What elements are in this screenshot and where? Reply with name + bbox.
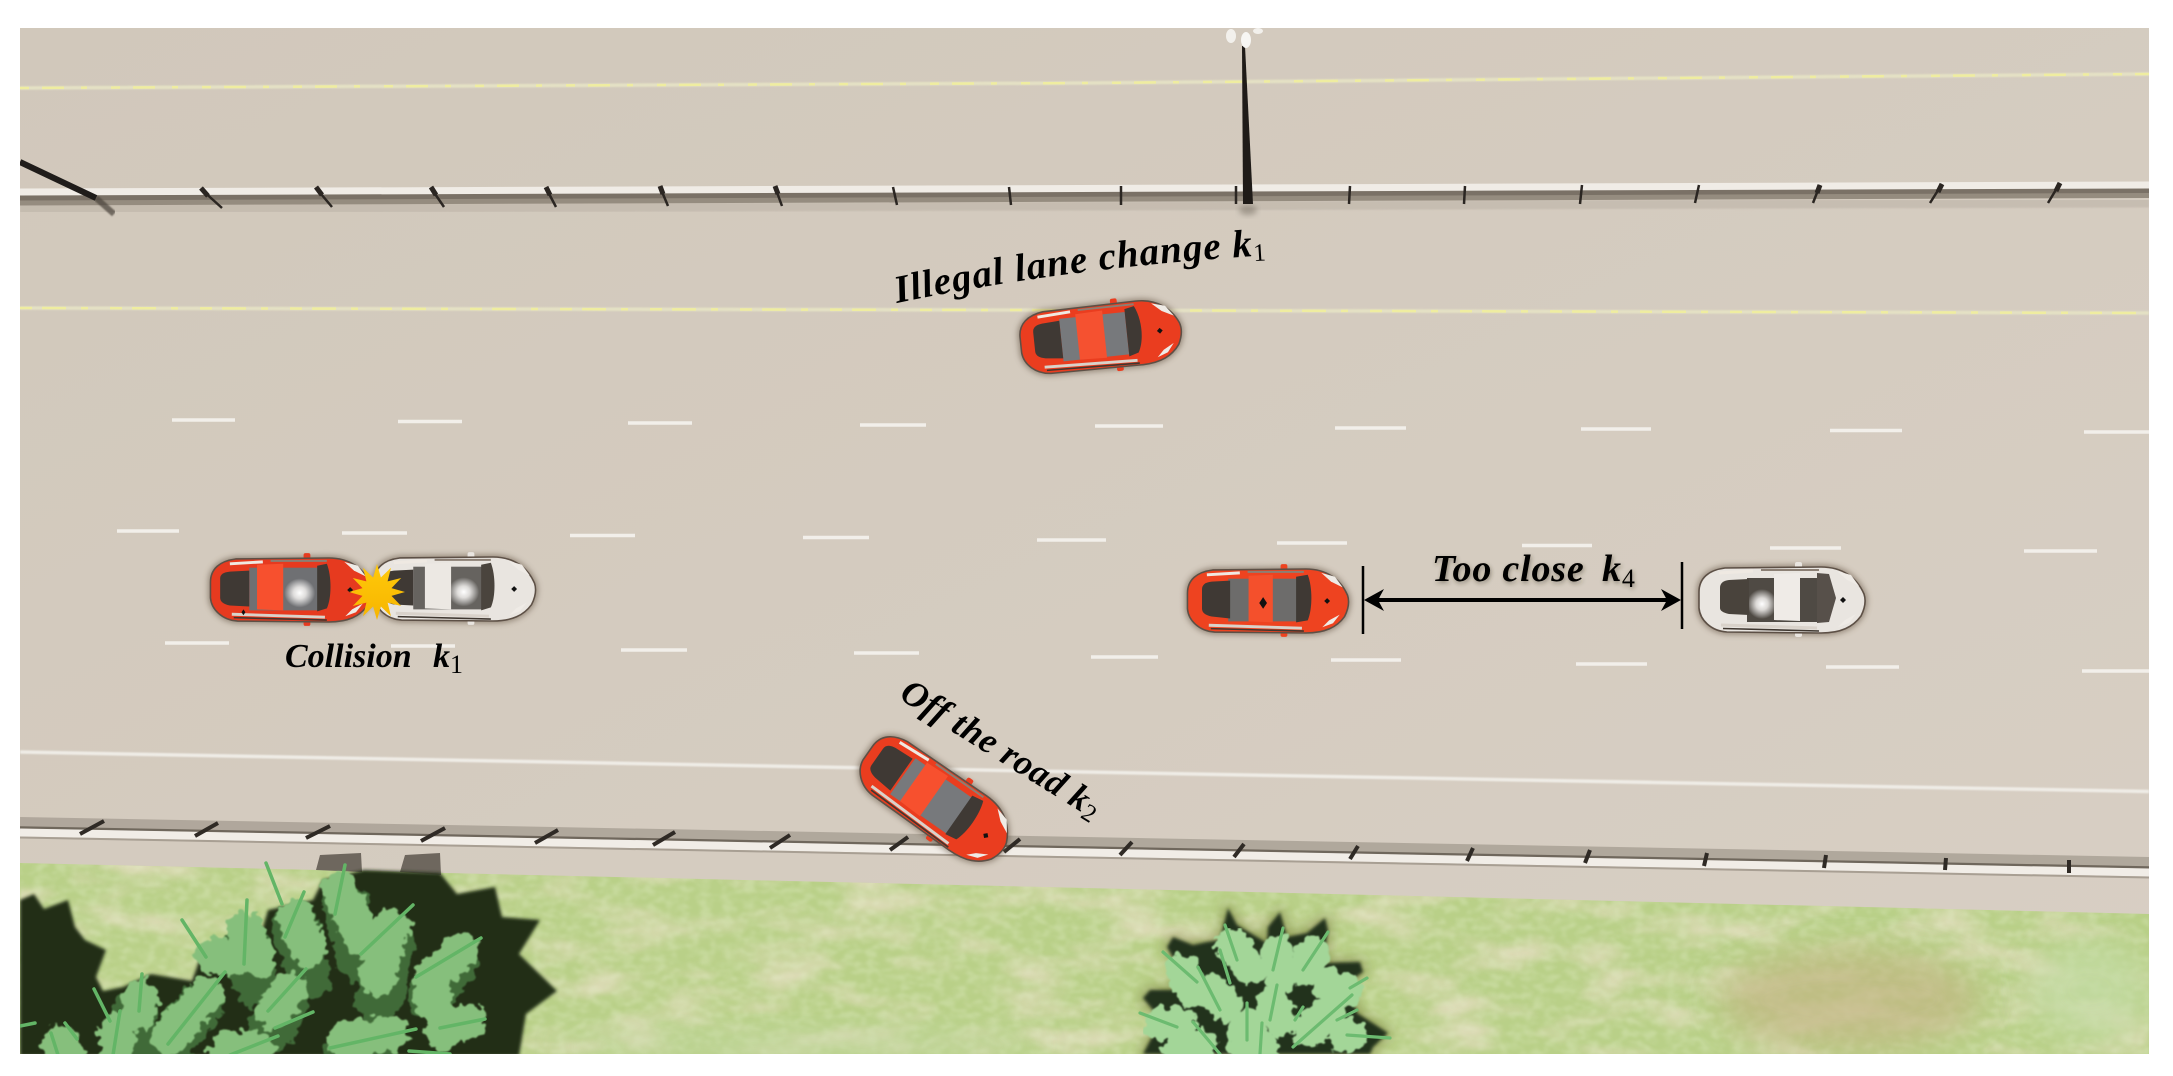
car: too close, red bbox=[1187, 564, 1348, 637]
car: illegal lane change bbox=[1017, 292, 1185, 381]
label: too close: k bbox=[1602, 548, 1622, 590]
light pole, left bbox=[20, 162, 114, 214]
label: collision: 1 bbox=[450, 650, 463, 679]
dashed lane line, row 3 bbox=[165, 643, 2149, 671]
car: collision, white bbox=[374, 552, 535, 625]
dashed lane line, row 1 bbox=[172, 420, 2149, 432]
tree foliage, left bbox=[20, 863, 485, 1056]
label: off the road: 2 bbox=[1080, 804, 1096, 823]
label: illegal lane change: 1 bbox=[1255, 244, 1265, 261]
label: too close: 4 bbox=[1622, 564, 1636, 593]
yellow lane line, top bbox=[20, 74, 2149, 88]
solid white edge line bbox=[20, 752, 2149, 792]
tree shadow, right bbox=[1143, 908, 1388, 1054]
tree foliage, right bbox=[1140, 925, 1390, 1056]
label: too close: Too close bbox=[1432, 548, 1585, 590]
car: off the road bbox=[854, 731, 1013, 867]
label: off the road: Off the road k bbox=[902, 684, 1090, 812]
label: collision: Collision bbox=[285, 638, 412, 675]
label: collision: k bbox=[433, 638, 450, 675]
icon: collision burst bbox=[349, 564, 405, 620]
label: illegal lane change: Illegal lane change k bbox=[896, 230, 1252, 304]
light pole with lamp, centre bbox=[1226, 28, 1263, 215]
gap arrow: too close bbox=[1363, 562, 1682, 634]
panel: grass verge bbox=[20, 860, 2150, 1059]
car: too close, white bbox=[1699, 562, 1865, 637]
car: collision, red bbox=[210, 553, 371, 626]
tree shadow and post shadows, left bbox=[20, 853, 557, 1056]
lower guard rail bbox=[20, 821, 2149, 878]
upper guard rail bbox=[20, 183, 2149, 209]
yellow lane line, middle bbox=[20, 308, 2149, 313]
dashed lane line, row 2 bbox=[117, 531, 2097, 551]
